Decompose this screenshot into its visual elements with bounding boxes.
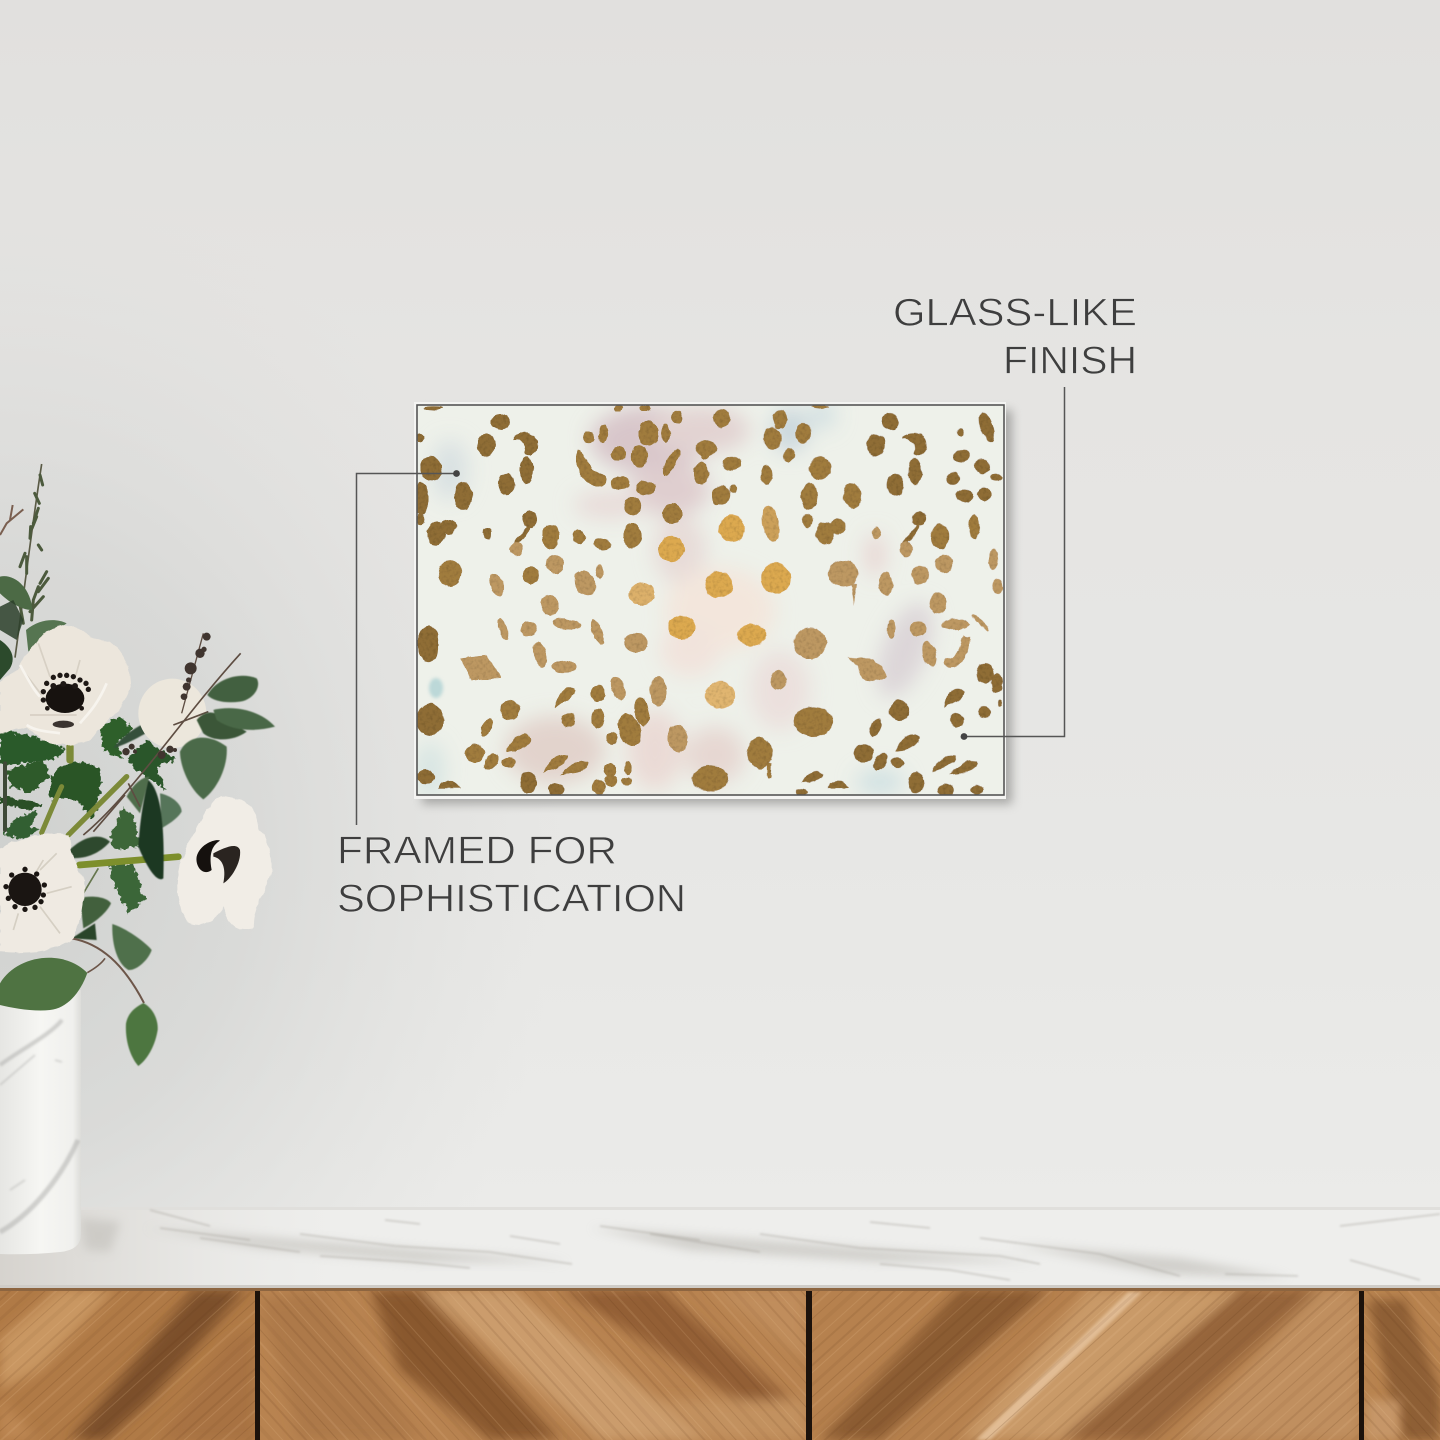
fern foliage <box>0 715 177 913</box>
lavender sprig <box>122 633 211 759</box>
framed artwork <box>413 401 1012 804</box>
label text right: FINISH <box>1003 340 1137 382</box>
wood panel 3 <box>812 1288 1359 1440</box>
label text left: SOPHISTICATION <box>337 878 686 920</box>
frame shadow <box>422 410 1012 804</box>
callout: glass-like finish <box>893 292 1137 740</box>
anemone bud right of top flower <box>138 679 206 748</box>
callout: framed for sophistication <box>337 470 686 920</box>
large leaf over vase <box>0 958 87 1010</box>
canvas with gold leaf spots <box>413 401 1004 798</box>
wood panel 2 <box>260 1288 806 1440</box>
watercolor washes <box>416 401 944 798</box>
green stems <box>5 747 178 865</box>
floral arrangement <box>0 464 275 1066</box>
leader dot left <box>453 470 460 477</box>
dark leaves <box>63 715 182 940</box>
gold spots <box>413 405 1003 797</box>
anemone flower top <box>0 625 131 745</box>
label text right <box>893 292 1137 382</box>
leader line right <box>964 387 1064 736</box>
anemone flower lower left <box>0 834 85 953</box>
wood panel 1 <box>0 1288 255 1440</box>
marble countertop <box>0 1207 1440 1289</box>
white floater frame <box>414 402 1006 799</box>
inner frame line <box>417 405 1004 795</box>
wood panel 4 <box>1364 1288 1440 1440</box>
eucalyptus leaves <box>112 676 275 1066</box>
sprig top left <box>0 464 48 658</box>
upper leaves <box>0 576 67 680</box>
label text left: FRAMED FOR <box>337 830 617 872</box>
wood cabinet fronts <box>0 1288 1440 1440</box>
label text left <box>337 830 686 920</box>
label text right: GLASS-LIKE <box>893 292 1137 334</box>
anemone flower right <box>177 795 272 929</box>
leader dot right <box>961 733 967 740</box>
marble vase <box>0 990 81 1254</box>
leader line left <box>356 474 456 825</box>
brown twigs <box>72 633 241 1003</box>
